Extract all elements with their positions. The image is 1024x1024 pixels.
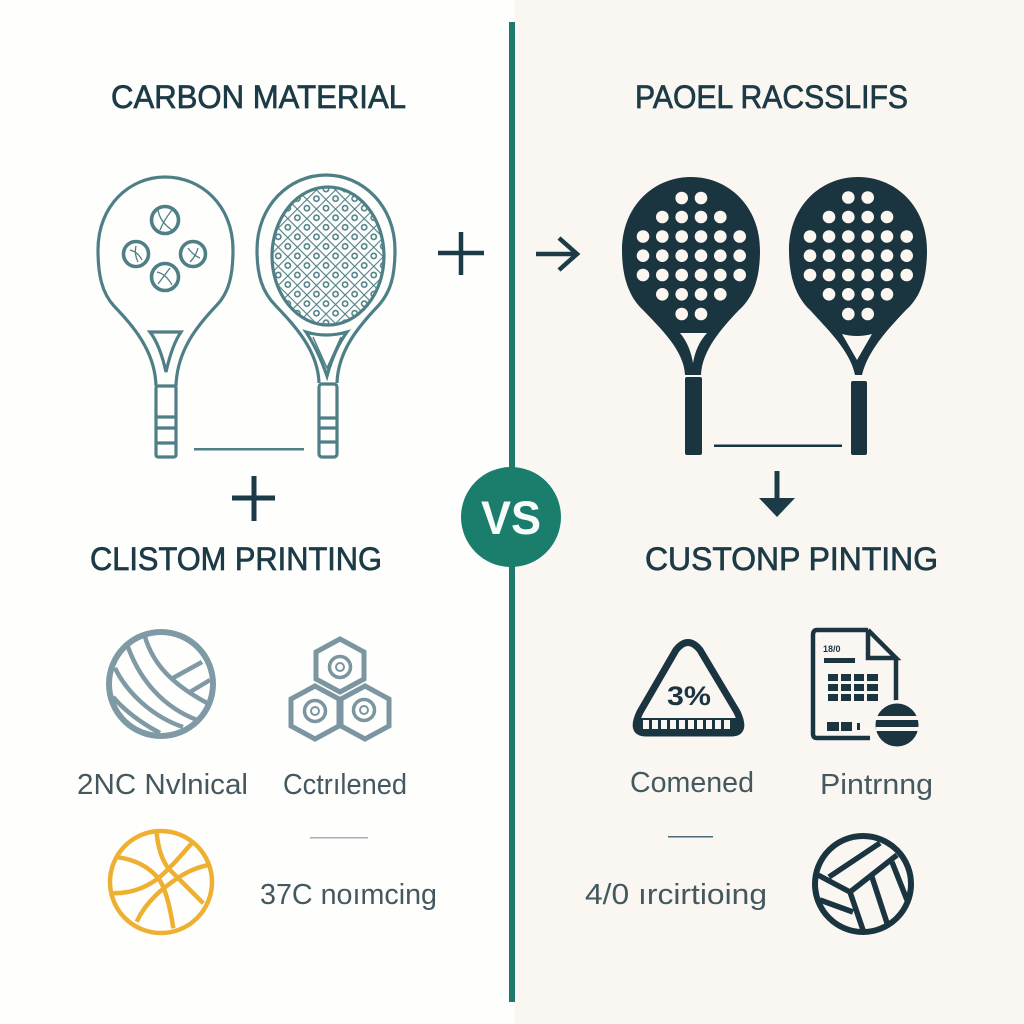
icon: dark volleyball bbox=[815, 836, 911, 932]
label: material right 1: Comened bbox=[630, 767, 754, 799]
heading: carbon material: CARBON MATERIAL bbox=[111, 79, 406, 115]
icon: arrow down bbox=[774, 471, 780, 512]
label: printing left: 37C noımcing bbox=[260, 879, 437, 911]
icon: triangle percentage: 3% bbox=[667, 681, 711, 711]
label: material 2: Cctrılened bbox=[283, 769, 407, 801]
panel: left background bbox=[0, 0, 515, 1024]
label: material 1: 2NC Nvlnical bbox=[77, 769, 248, 801]
icon: arrow right bbox=[536, 238, 577, 270]
icon: plus under left rackets bbox=[232, 476, 275, 521]
label: material right 2: Pintrnng bbox=[820, 769, 933, 801]
icon: document with ball bbox=[813, 630, 922, 750]
badge: VS bbox=[461, 467, 561, 567]
connector line right bbox=[714, 444, 842, 447]
divider small right bbox=[668, 836, 713, 838]
icon: outline racket with mesh bbox=[257, 175, 395, 457]
heading: custom printing right: CUSTONP PINTING bbox=[645, 541, 938, 577]
panel: right background bbox=[515, 0, 1024, 1024]
heading: custom printing left: CLISTOM PRINTING bbox=[90, 541, 382, 577]
icon: arrow down head bbox=[759, 498, 795, 517]
icon: plus between rackets bbox=[438, 232, 484, 275]
divider small left bbox=[310, 837, 368, 838]
badge: VS: VS bbox=[481, 491, 541, 544]
icon: dark racket two bbox=[789, 177, 927, 455]
divider line bbox=[509, 22, 515, 1002]
label: printing right: 4/0 ırcirtioing bbox=[585, 879, 767, 911]
icon: hexagon cluster bbox=[291, 639, 389, 739]
icon: grey woven ball bbox=[109, 632, 213, 736]
connector line left bbox=[194, 448, 304, 450]
icon: yellow ball bbox=[110, 831, 212, 933]
heading: padel rackets: PAOEL RACSSLIFS bbox=[635, 79, 908, 115]
icon: dark racket one bbox=[622, 177, 760, 455]
icon: triangle percentage bbox=[636, 642, 741, 735]
icon: document with ball: 18/0 bbox=[823, 644, 841, 654]
icon: outline racket with holes bbox=[98, 177, 233, 457]
